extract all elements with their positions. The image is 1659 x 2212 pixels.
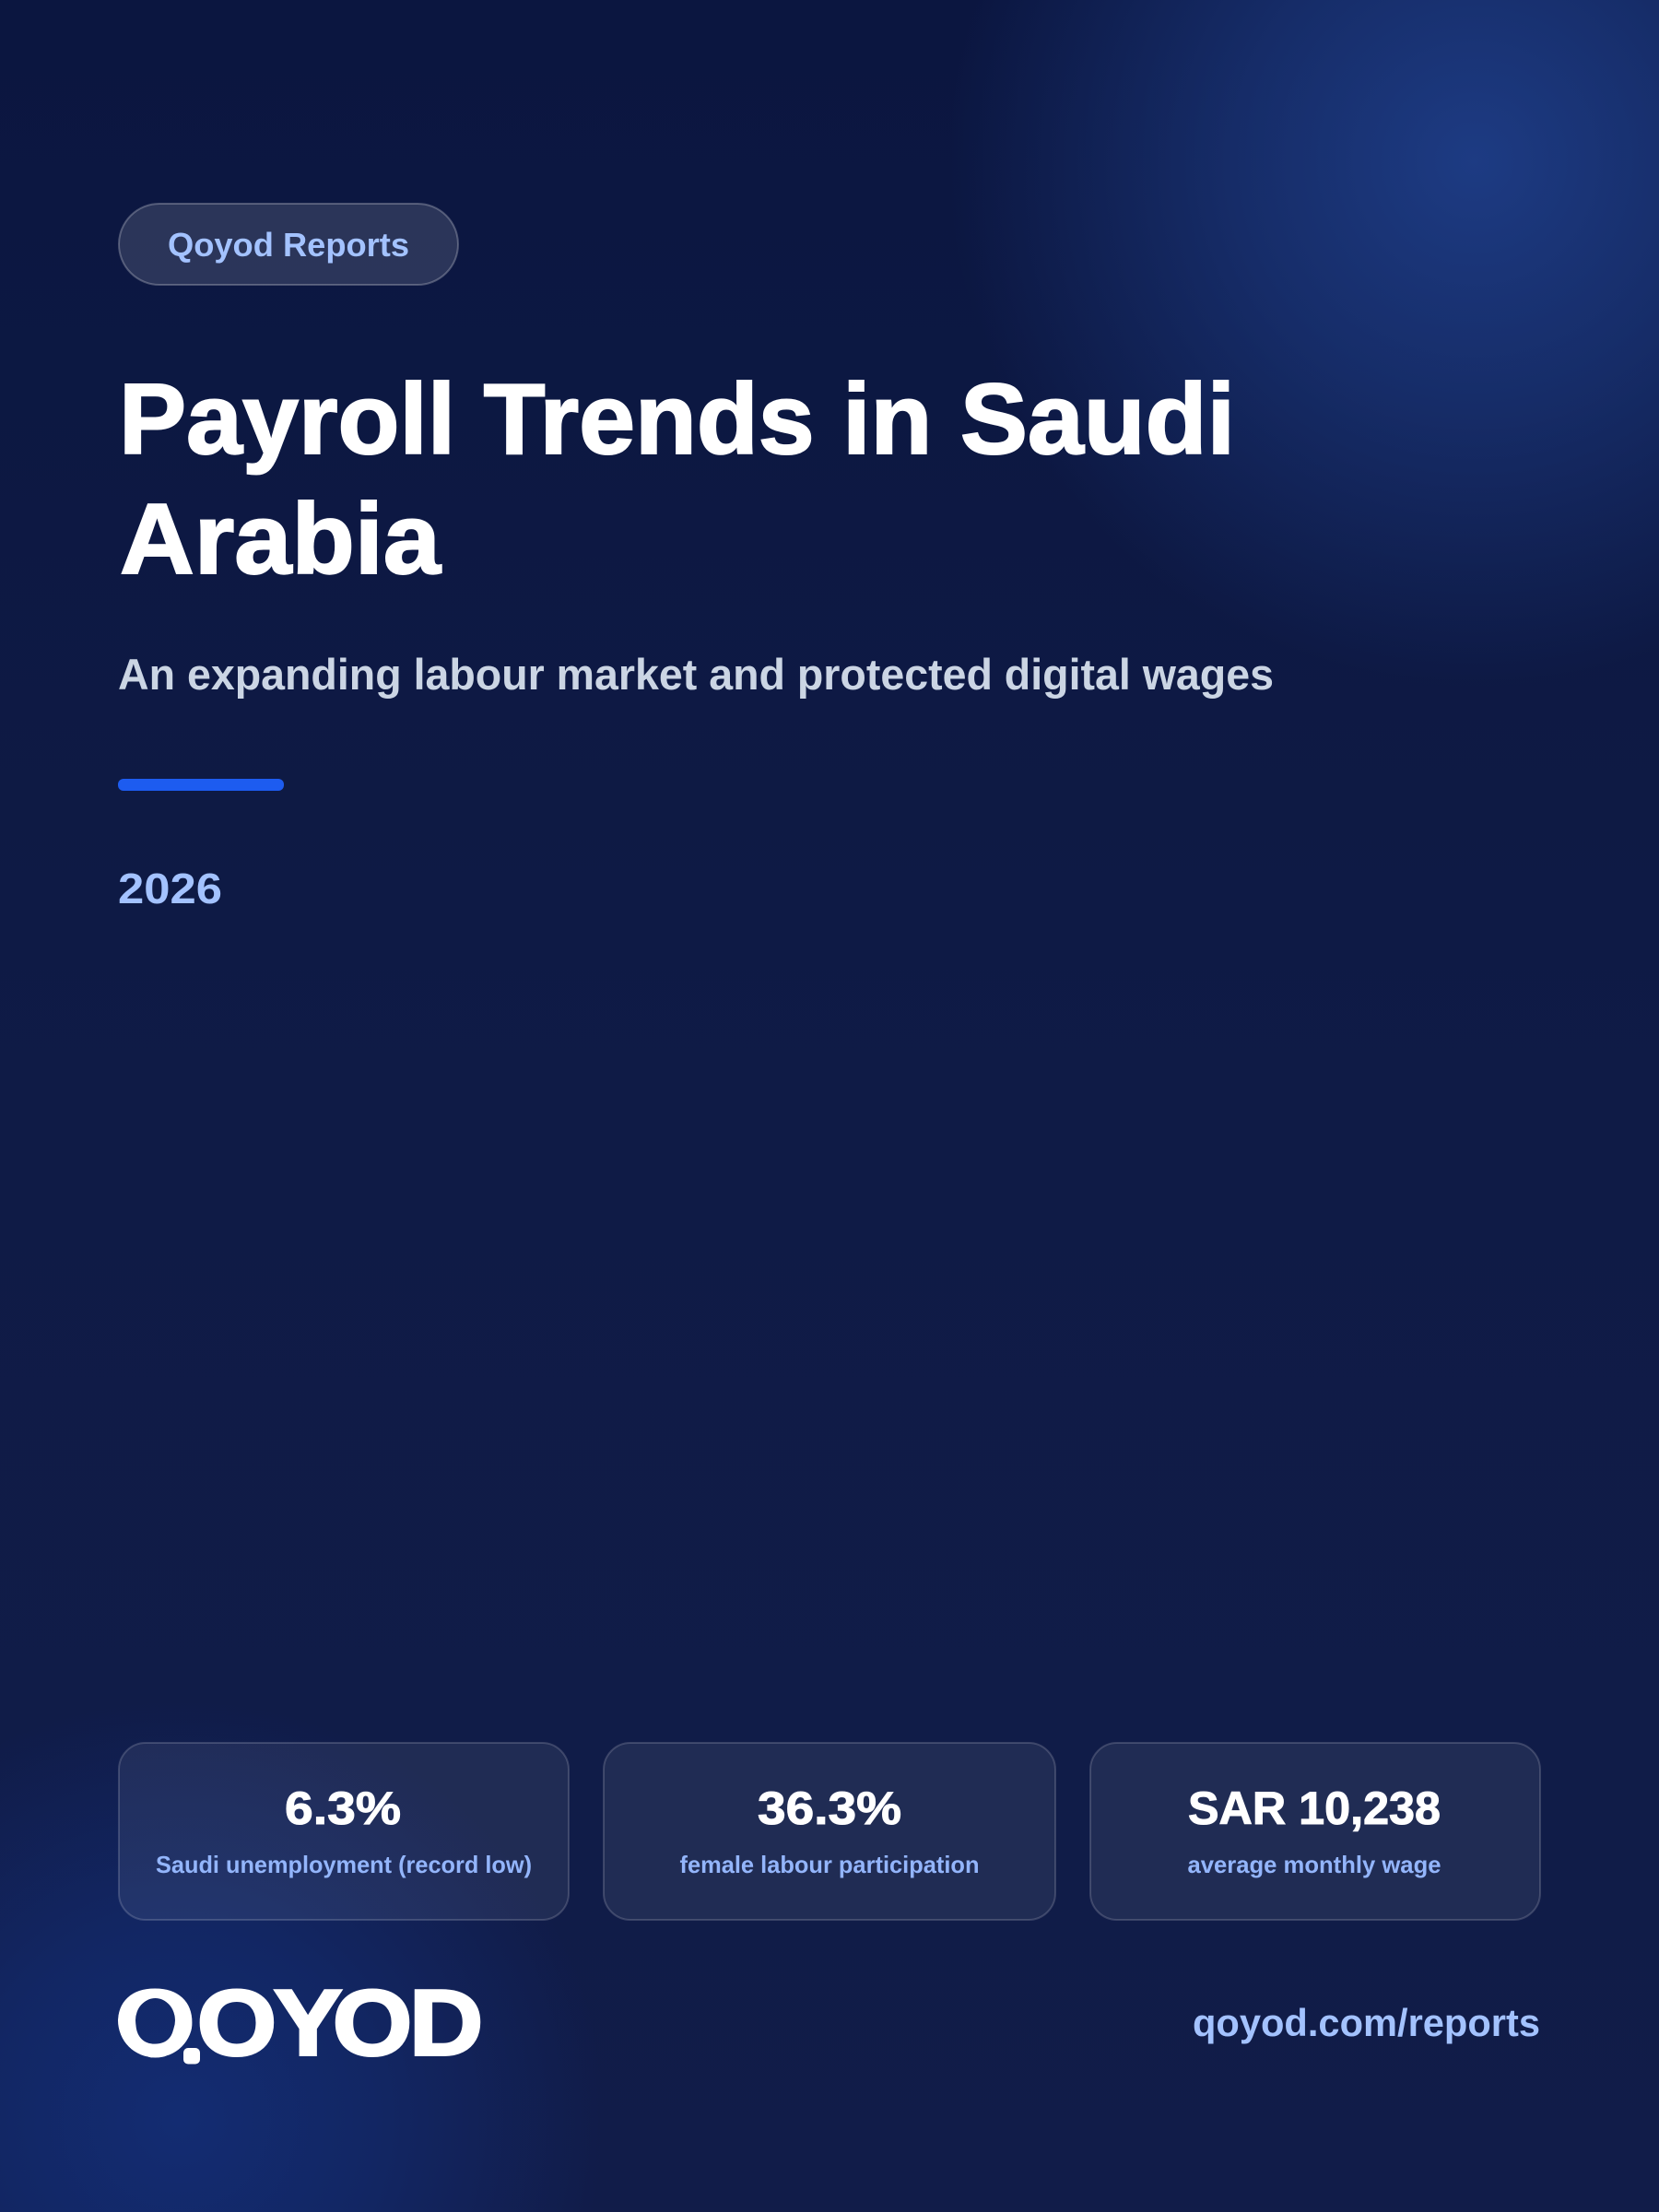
title: Arabia bbox=[120, 483, 441, 595]
stat card: unemployment: Saudi unemployment (record low) bbox=[156, 1851, 532, 1878]
title: Payroll Trends in Saudi bbox=[119, 363, 1235, 476]
stat card: female participation: female labour participation bbox=[680, 1851, 979, 1878]
website link: qoyod.com/reports bbox=[1193, 2001, 1540, 2044]
stat card: unemployment: 6.3% bbox=[285, 1783, 401, 1834]
stat card: average wage: average monthly wage bbox=[1187, 1851, 1441, 1878]
year: 2026 bbox=[118, 865, 222, 912]
logo: QOYOD: QOYOD bbox=[115, 1971, 483, 2075]
accent bar bbox=[118, 779, 284, 791]
stat card: female participation: 36.3% bbox=[758, 1783, 901, 1834]
stat card: average wage: SAR 10,238 bbox=[1188, 1783, 1441, 1834]
badge: Qoyod Reports: Qoyod Reports bbox=[168, 226, 409, 264]
badge: Qoyod Reports bbox=[119, 204, 458, 285]
stat card: female participation bbox=[604, 1743, 1055, 1920]
title bbox=[119, 363, 1235, 595]
subtitle: An expanding labour market and protected digital wages bbox=[118, 650, 1274, 699]
stat card: average wage bbox=[1090, 1743, 1540, 1920]
stat card: unemployment bbox=[119, 1743, 569, 1920]
